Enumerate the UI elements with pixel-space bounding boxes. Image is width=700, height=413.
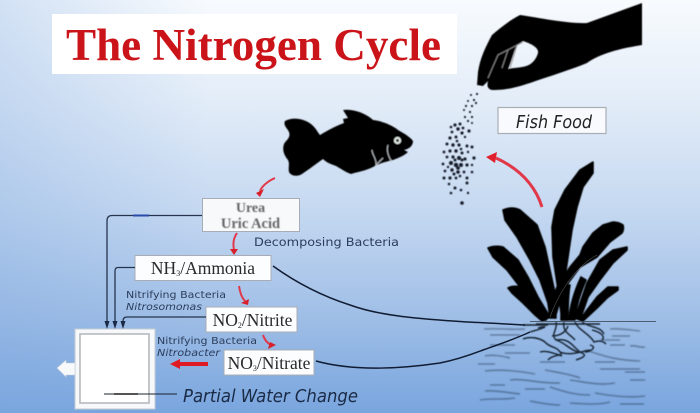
box: nitrite <box>206 307 297 332</box>
box: nitrite: NO <box>213 310 238 330</box>
icon: hand dropping food <box>477 3 642 90</box>
line: urea to tank <box>104 216 202 329</box>
arrow: ammonia to nitrite <box>239 286 249 305</box>
icon: plant <box>488 162 627 321</box>
box: nitrite: /Nitrite <box>242 310 293 330</box>
label: nitrosomonas bacteria <box>126 290 226 313</box>
arrow: water out of tank <box>57 360 75 377</box>
icon: fish <box>283 110 413 176</box>
arrow: plant to food <box>486 152 542 207</box>
icon: plant roots <box>523 322 606 360</box>
substrate line <box>530 320 656 322</box>
box: urea and uric acid: Urea <box>236 201 265 216</box>
box: ammonia: 3 <box>176 269 180 278</box>
box: urea and uric acid <box>202 198 300 232</box>
box: ammonia: NH <box>151 258 176 278</box>
box: nitrite: 2 <box>238 321 242 330</box>
label: nitrobacter bacteria: Nitrifying Bacteria <box>157 336 257 347</box>
line: partial water change leader <box>104 393 177 395</box>
tank <box>75 329 155 409</box>
box: nitrate: 3 <box>253 364 257 373</box>
arrow: nitrate to tank <box>170 359 208 369</box>
label: decomposing bacteria: Decomposing Bacteria <box>254 235 399 249</box>
box: nitrate <box>224 350 314 375</box>
substrate ripples <box>478 329 645 405</box>
box: ammonia <box>135 256 271 280</box>
box: ammonia: /Ammonia <box>180 258 255 278</box>
arrow: nitrite to nitrate <box>263 335 276 349</box>
box: nitrate: NO <box>228 353 253 373</box>
arrow: fish to urea <box>256 178 275 197</box>
label: partial water change: Partial Water Change <box>183 387 358 407</box>
box: urea and uric acid: Uric Acid <box>221 216 280 232</box>
line: nitrite to tank <box>120 317 206 329</box>
label: nitrobacter bacteria: Nitrobacter <box>157 348 221 359</box>
arrow: urea to ammonia <box>230 233 238 255</box>
line: ammonia to plant roots <box>273 266 525 325</box>
icon: falling fish food <box>442 93 478 205</box>
label: fish food: Fish Food <box>516 112 593 133</box>
label: nitrosomonas bacteria: Nitrifying Bacteria <box>126 290 226 301</box>
plant leaf highlight <box>550 255 597 317</box>
box: nitrate: /Nitrate <box>257 353 311 373</box>
label: fish food <box>498 108 606 134</box>
line: ammonia to tank <box>112 268 135 329</box>
line: nitrate to plant roots <box>316 332 530 368</box>
label: nitrosomonas bacteria: Nitrosomonas <box>126 302 202 313</box>
title: The Nitrogen Cycle <box>66 20 441 70</box>
label: nitrobacter bacteria <box>157 336 257 359</box>
